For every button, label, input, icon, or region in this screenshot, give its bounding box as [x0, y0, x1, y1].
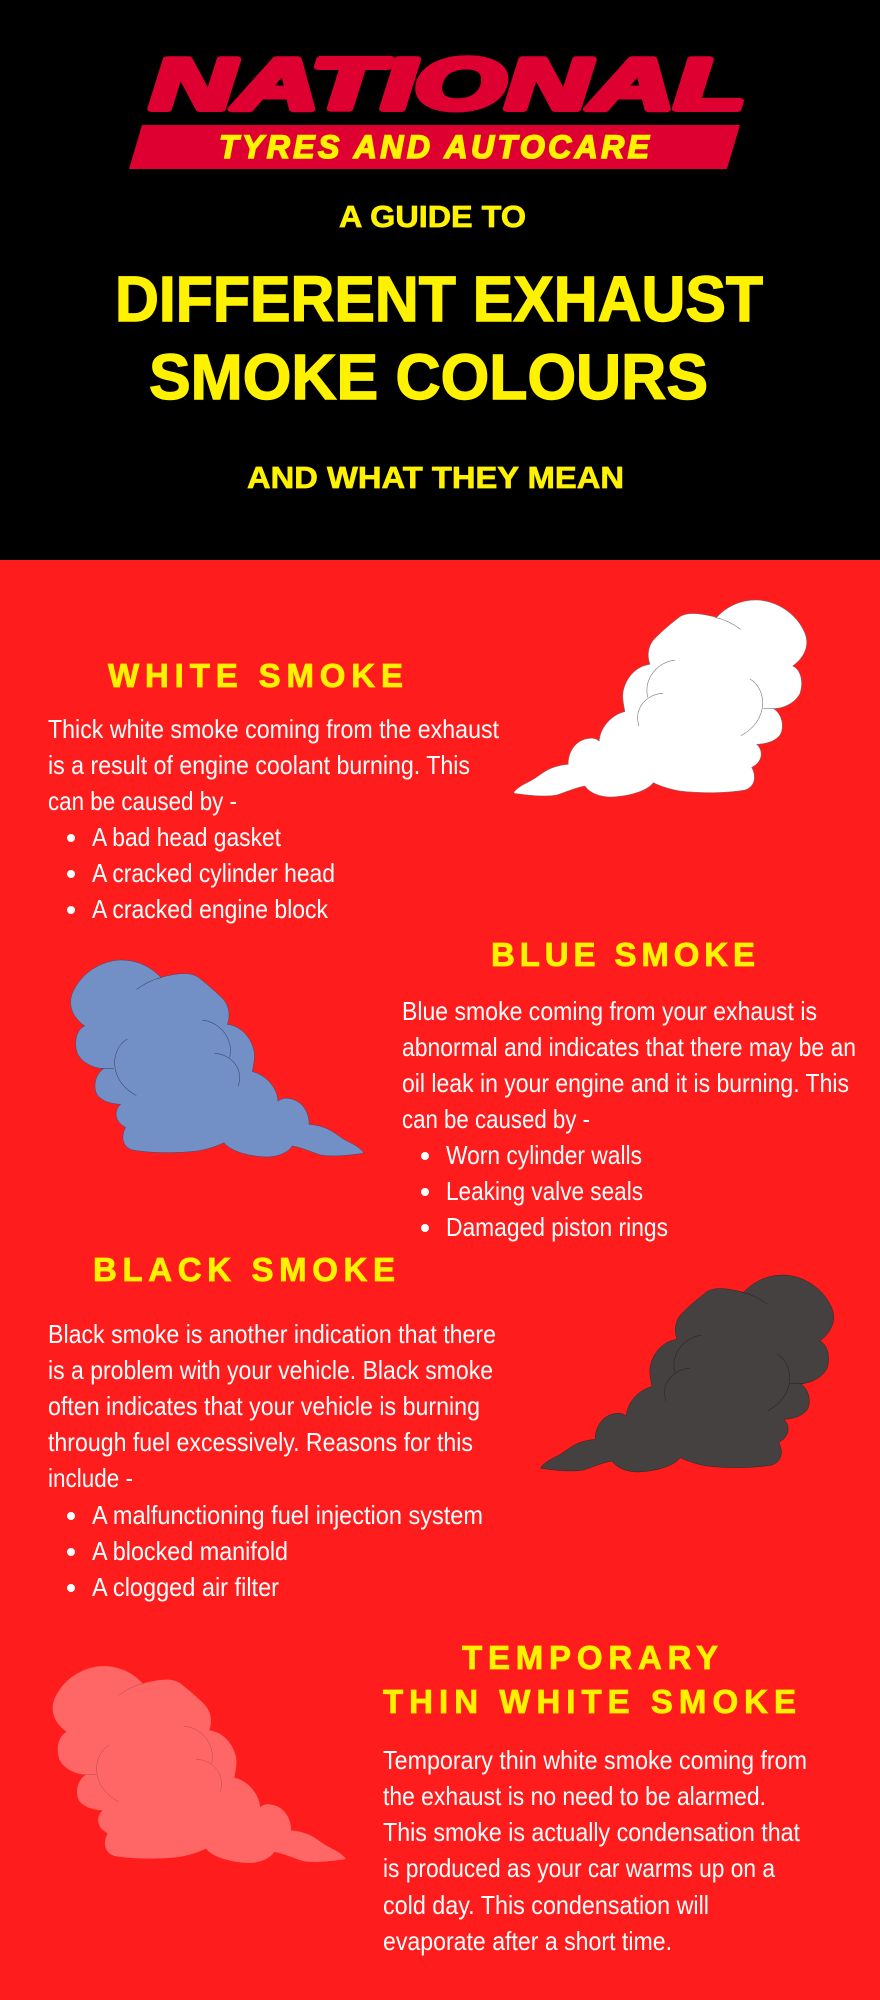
list: white smoke causes: A bad head gasket — [92, 822, 282, 852]
heading: temporary thin white smoke: THIN WHITE SMOKE — [383, 1683, 796, 1720]
text block: black smoke description — [48, 1319, 496, 1493]
icon: blue smoke cloud — [71, 960, 363, 1157]
heading: temporary thin white smoke — [383, 1639, 796, 1720]
icon: white smoke cloud — [514, 600, 807, 797]
logo: National Tyres and Autocare — [129, 45, 746, 169]
title: different exhaust smoke colours — [115, 263, 763, 413]
subheading: and what they mean: AND WHAT THEY MEAN — [247, 460, 624, 495]
text block: temporary smoke description: Temporary thin white smoke coming from — [383, 1745, 807, 1775]
logo: National Tyres and Autocare: TYRES AND AUTOCARE — [219, 129, 651, 165]
text block: black smoke description: often indicates that your vehicle is burning — [48, 1391, 480, 1421]
heading: a guide to: A GUIDE TO — [339, 199, 526, 234]
title: different exhaust smoke colours: DIFFERENT EXHAUST — [115, 263, 763, 335]
text block: temporary smoke description — [383, 1745, 807, 1956]
title: different exhaust smoke colours: SMOKE COLOURS — [149, 341, 708, 413]
text block: white smoke description: can be caused by - — [48, 786, 237, 816]
text block: black smoke description: through fuel excessively. Reasons for this — [48, 1427, 473, 1457]
list: black smoke causes: A malfunctioning fuel injection system — [92, 1500, 483, 1530]
text block: white smoke description: Thick white smoke coming from the exhaust — [48, 714, 500, 744]
list: black smoke causes: A clogged air filter — [92, 1572, 279, 1602]
logo: National Tyres and Autocare: NATIONAL — [150, 45, 746, 125]
text block: temporary smoke description: evaporate after a short time. — [383, 1926, 672, 1956]
text block: blue smoke description: Blue smoke coming from your exhaust is — [402, 996, 817, 1026]
heading: black smoke: BLACK SMOKE — [93, 1251, 395, 1288]
text block: temporary smoke description: cold day. This condensation will — [383, 1890, 709, 1920]
panel: black smoke — [48, 1251, 834, 1602]
list: blue smoke causes — [421, 1140, 668, 1242]
list: white smoke causes: A cracked engine block — [92, 894, 329, 924]
list: white smoke causes: A cracked cylinder head — [92, 858, 335, 888]
panel: header — [0, 0, 880, 560]
heading: temporary thin white smoke: TEMPORARY — [462, 1639, 718, 1676]
list: black smoke causes — [67, 1500, 483, 1602]
text block: black smoke description: Black smoke is another indication that there — [48, 1319, 496, 1349]
heading: white smoke: WHITE SMOKE — [108, 657, 403, 694]
list: white smoke causes — [67, 822, 335, 924]
text block: temporary smoke description: This smoke is actually condensation that — [383, 1817, 801, 1847]
panel: temporary thin white smoke — [53, 1639, 807, 1956]
list: blue smoke causes: Worn cylinder walls — [446, 1140, 642, 1170]
panel: blue smoke — [71, 936, 856, 1242]
text block: white smoke description: is a result of engine coolant burning. This — [48, 750, 470, 780]
list: black smoke causes: A blocked manifold — [92, 1536, 288, 1566]
icon: black smoke cloud — [541, 1275, 834, 1472]
text block: temporary smoke description: the exhaust is no need to be alarmed. — [383, 1781, 766, 1811]
text block: blue smoke description: can be caused by - — [402, 1104, 590, 1134]
icon: pink smoke cloud — [53, 1666, 345, 1863]
list: blue smoke causes: Damaged piston rings — [446, 1212, 668, 1242]
list: blue smoke causes: Leaking valve seals — [446, 1176, 643, 1206]
text block: black smoke description: is a problem with your vehicle. Black smoke — [48, 1355, 493, 1385]
panel: white smoke — [48, 600, 807, 924]
text block: white smoke description — [48, 714, 500, 816]
heading: blue smoke: BLUE SMOKE — [491, 936, 755, 973]
text block: blue smoke description — [402, 996, 856, 1134]
text block: temporary smoke description: is produced as your car warms up on a — [383, 1853, 775, 1883]
text block: black smoke description: include - — [48, 1463, 133, 1493]
